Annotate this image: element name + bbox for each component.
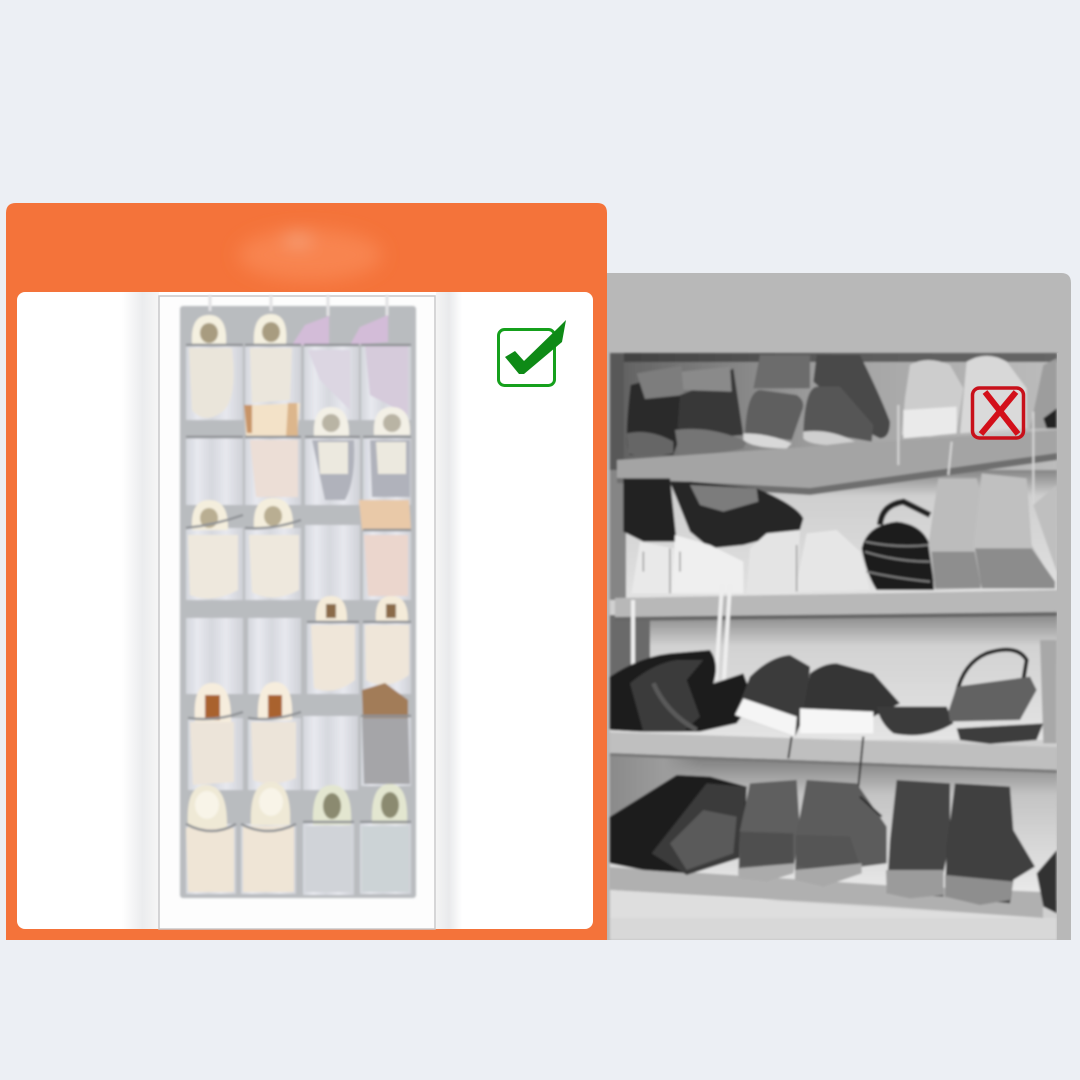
second shelf shoes <box>623 473 1057 593</box>
panel: organizer (orange card) <box>6 203 607 940</box>
bottom shelf shoes <box>610 775 1057 913</box>
gray margin right of photo <box>1057 353 1071 940</box>
strip under cards <box>0 940 1080 1080</box>
photo: grayscale shoe shelves <box>610 353 1057 940</box>
shelf walls <box>610 353 1057 900</box>
sneakers row 4 <box>316 596 347 622</box>
gray sneakers row 2 <box>314 407 349 437</box>
brown sandal row 5 <box>362 683 408 718</box>
pocket trim highlights <box>186 345 411 831</box>
shelf 4 <box>610 867 1043 918</box>
blurred logo smudge <box>238 229 382 281</box>
photo: hanging shoe organizer <box>180 295 416 898</box>
icon: green check badge <box>498 320 566 386</box>
door frame side band right <box>436 292 462 929</box>
wedge pair row 2 <box>244 403 300 437</box>
top shelf shoes <box>627 355 1057 505</box>
pockets <box>186 345 411 895</box>
hanging hooks <box>210 295 387 316</box>
shelf 2 <box>615 590 1057 618</box>
organizer backing <box>180 306 416 898</box>
sneakers row 1 <box>192 315 226 345</box>
shelf 3 <box>610 732 1057 770</box>
panel: cluttered shelves (gray card) <box>600 273 1071 940</box>
icon: red cross badge <box>972 388 1024 438</box>
door frame side band left <box>122 292 159 929</box>
sneakers row 3 <box>192 500 228 530</box>
third shelf shoes <box>610 640 1057 787</box>
sneakers row 5 <box>195 683 231 722</box>
floral shoes row 6 <box>313 785 351 825</box>
shelf 1 <box>617 430 1057 488</box>
pink heels row 1 <box>292 316 329 345</box>
door <box>159 296 435 929</box>
wedge pair row 3 <box>359 500 411 530</box>
cream flats row 6 <box>188 785 227 828</box>
hanging laces <box>633 585 730 680</box>
white image area <box>17 292 593 929</box>
